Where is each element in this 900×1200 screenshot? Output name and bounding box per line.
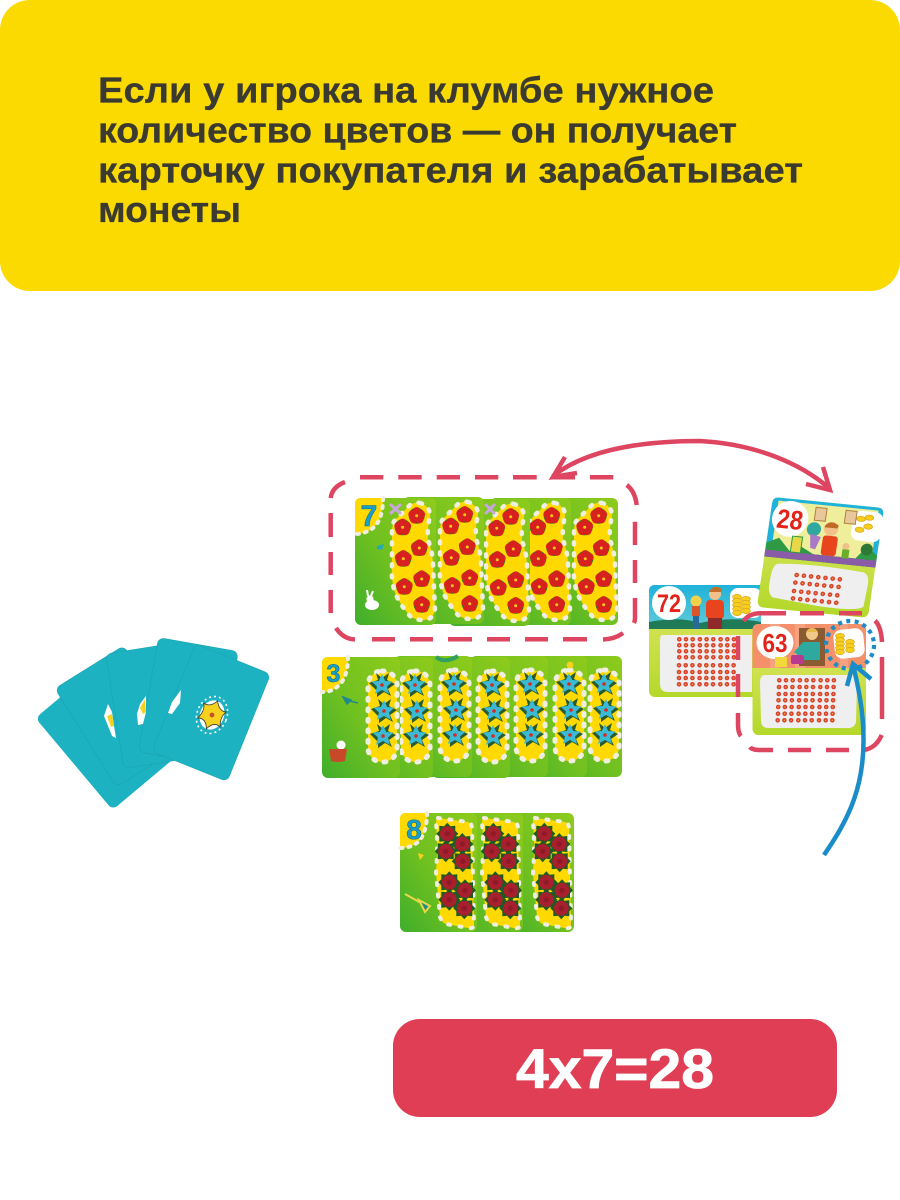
icon: green snake	[436, 656, 458, 660]
panel: yellow header	[0, 0, 900, 291]
man with bouquet	[803, 520, 840, 556]
heading text	[98, 70, 803, 230]
icon: trowel	[343, 697, 358, 704]
arrowhead	[847, 664, 871, 686]
heading text: монеты	[98, 189, 241, 230]
number corner 3: 3	[327, 660, 340, 688]
heading text: карточку покупателя и зарабатывает	[98, 150, 803, 190]
blob with dots	[660, 635, 752, 692]
heading text: количество цветов — он получает	[98, 110, 737, 151]
flowerbed cards: sevens	[355, 497, 618, 626]
number badge 63: 63	[762, 628, 788, 658]
coin bubble	[850, 510, 884, 543]
shopkeeper	[775, 628, 825, 667]
heading text: Если у игрока на клумбе нужное	[98, 70, 714, 110]
coin bubble	[730, 588, 762, 618]
dashed frame: flower cards	[331, 477, 637, 640]
icon: garden spade	[405, 894, 430, 912]
number corner 7: 7	[361, 500, 377, 533]
arrowhead right	[806, 467, 830, 490]
customer card 28	[757, 497, 885, 618]
arrowhead left	[553, 457, 577, 477]
dashed frame: customer card 63	[738, 613, 882, 750]
number badge 72: 72	[657, 590, 681, 618]
flowerbed cards: eights	[400, 813, 574, 932]
icon: white rabbit	[365, 590, 379, 610]
coin bubble	[833, 628, 865, 659]
number corner 8: 8	[406, 814, 422, 845]
icon: yellow chick	[567, 662, 573, 668]
panel: red formula pill	[393, 1019, 837, 1117]
blob with dots	[767, 561, 870, 611]
icon: butterfly	[391, 505, 400, 513]
people: woman and man	[690, 587, 724, 629]
flower slivers on covered cards	[71, 0, 181, 738]
number badge 28: 28	[775, 503, 805, 536]
customer card 72	[649, 585, 762, 697]
arrow: red two-way curve	[553, 441, 830, 490]
dotted circle: coin reward	[826, 621, 874, 669]
blob with dots	[760, 675, 857, 728]
flowerbed cards: threes	[322, 656, 622, 778]
number corner 3	[322, 657, 348, 692]
icon: yellow bird	[418, 853, 424, 860]
icon: rabbit in basket	[329, 740, 347, 762]
arrow: blue pointer to coins	[824, 664, 871, 855]
formula text: 4x7=28	[516, 1037, 714, 1100]
fan of teal card backs	[35, 0, 271, 810]
customer card 63	[752, 624, 866, 735]
number corner 8	[400, 813, 427, 848]
icon: second butterfly	[486, 505, 494, 513]
icon: yellow flower emblem	[191, 692, 233, 738]
icon: teal bird	[377, 544, 384, 550]
number corner 7	[355, 498, 383, 534]
picture frames and neighbour	[790, 505, 878, 561]
